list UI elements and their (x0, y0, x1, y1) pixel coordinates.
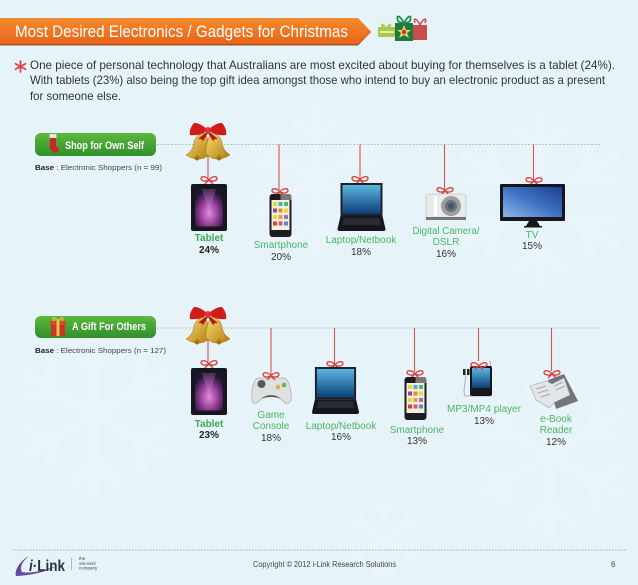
item: Laptop/Netbook 18%: Laptop/Netbook (326, 235, 397, 246)
item: Smartphone 20%: 20% (271, 252, 291, 263)
title banner: Most Desired Electronics / Gadgets for Christmas (15, 22, 348, 41)
item: MP3/MP4 player 13%: 13% (474, 416, 494, 427)
dotted line: section 1 (157, 144, 600, 146)
button: A Gift For Others: A Gift For Others (72, 321, 146, 333)
bells: section 2 (186, 307, 230, 344)
item: Game Console 18%: Console (253, 421, 290, 432)
item: e-Book Reader 12%: 12% (546, 437, 566, 448)
intro text: With tablets (23%) also being the top gift idea amongst those who intend to buy an electronic product as a present (30, 73, 606, 87)
item: Tablet 23%: 23% (199, 430, 219, 441)
item: Digital Camera/DSLR 16%: Digital Camera/ (412, 226, 480, 237)
item: Smartphone 13% (390, 328, 445, 447)
item: Smartphone 13%: 13% (407, 436, 427, 447)
logo: i-Link: the (79, 556, 86, 561)
intro text: One piece of personal technology that Australians are most excited about buying for themselves is a tablet (24%). (30, 58, 615, 72)
icon: gift boxes (378, 16, 427, 41)
icon: bullet snowflake (16, 61, 26, 72)
item: Smartphone 13%: Smartphone (390, 425, 445, 436)
logo: i-Link: i·Link (29, 558, 65, 575)
item: Digital Camera/DSLR 16% (412, 144, 480, 260)
base note: section 2: Base : Electronic Shoppers (n = 127) (35, 346, 167, 355)
item: Tablet 24%: 24% (199, 245, 219, 256)
background snowflakes (15, 109, 630, 581)
title banner (0, 18, 371, 46)
intro text (30, 58, 615, 103)
dotted line: section 2 (157, 327, 600, 329)
button: Shop for Own Self (35, 133, 156, 156)
item: MP3/MP4 player 13% (447, 328, 522, 427)
item: Digital Camera/DSLR 16%: DSLR (433, 237, 459, 248)
item: e-Book Reader 12%: e-Book (540, 414, 573, 425)
item: Game Console 18%: 18% (261, 433, 281, 444)
item: Laptop/Netbook 18%: 18% (351, 247, 371, 258)
item: Laptop/Netbook 16% (306, 328, 377, 443)
item: Laptop/Netbook 16%: Laptop/Netbook (306, 421, 377, 432)
button: Shop for Own Self: Shop for Own Self (65, 140, 144, 152)
item: Tablet 24% (191, 155, 227, 256)
footer dotted line (12, 549, 626, 551)
item: Digital Camera/DSLR 16%: 16% (436, 249, 456, 260)
page number: 6 (611, 560, 616, 569)
item: TV 15%: 15% (522, 241, 542, 252)
item: Smartphone 20%: Smartphone (254, 240, 309, 251)
item: Laptop/Netbook 18% (326, 144, 397, 258)
logo: i-Link (16, 556, 98, 576)
item: e-Book Reader 12%: Reader (540, 425, 573, 436)
button: A Gift For Others (35, 316, 156, 338)
item: MP3/MP4 player 13%: MP3/MP4 player (447, 404, 522, 415)
intro text: for someone else. (30, 89, 121, 103)
item: Tablet 23%: Tablet (195, 419, 224, 430)
item: Game Console 18% (252, 328, 291, 444)
base note: section 1: Base : Electronic Shoppers (n = 99) (35, 163, 163, 172)
item: Laptop/Netbook 16%: 16% (331, 432, 351, 443)
item: Tablet 24%: Tablet (195, 233, 224, 244)
item: e-Book Reader 12% (530, 328, 578, 448)
bells: section 1 (186, 123, 230, 160)
item: Game Console 18%: Game (257, 410, 285, 421)
logo: i-Link: online research (79, 561, 96, 566)
logo: i-Link: company (79, 566, 98, 570)
item: Tablet 23% (191, 339, 227, 441)
item: TV 15% (500, 144, 565, 252)
item: Smartphone 20% (254, 144, 309, 263)
copyright: Copyright © 2012 i-Link Research Solutions (253, 560, 396, 569)
item: TV 15%: TV (526, 230, 539, 241)
